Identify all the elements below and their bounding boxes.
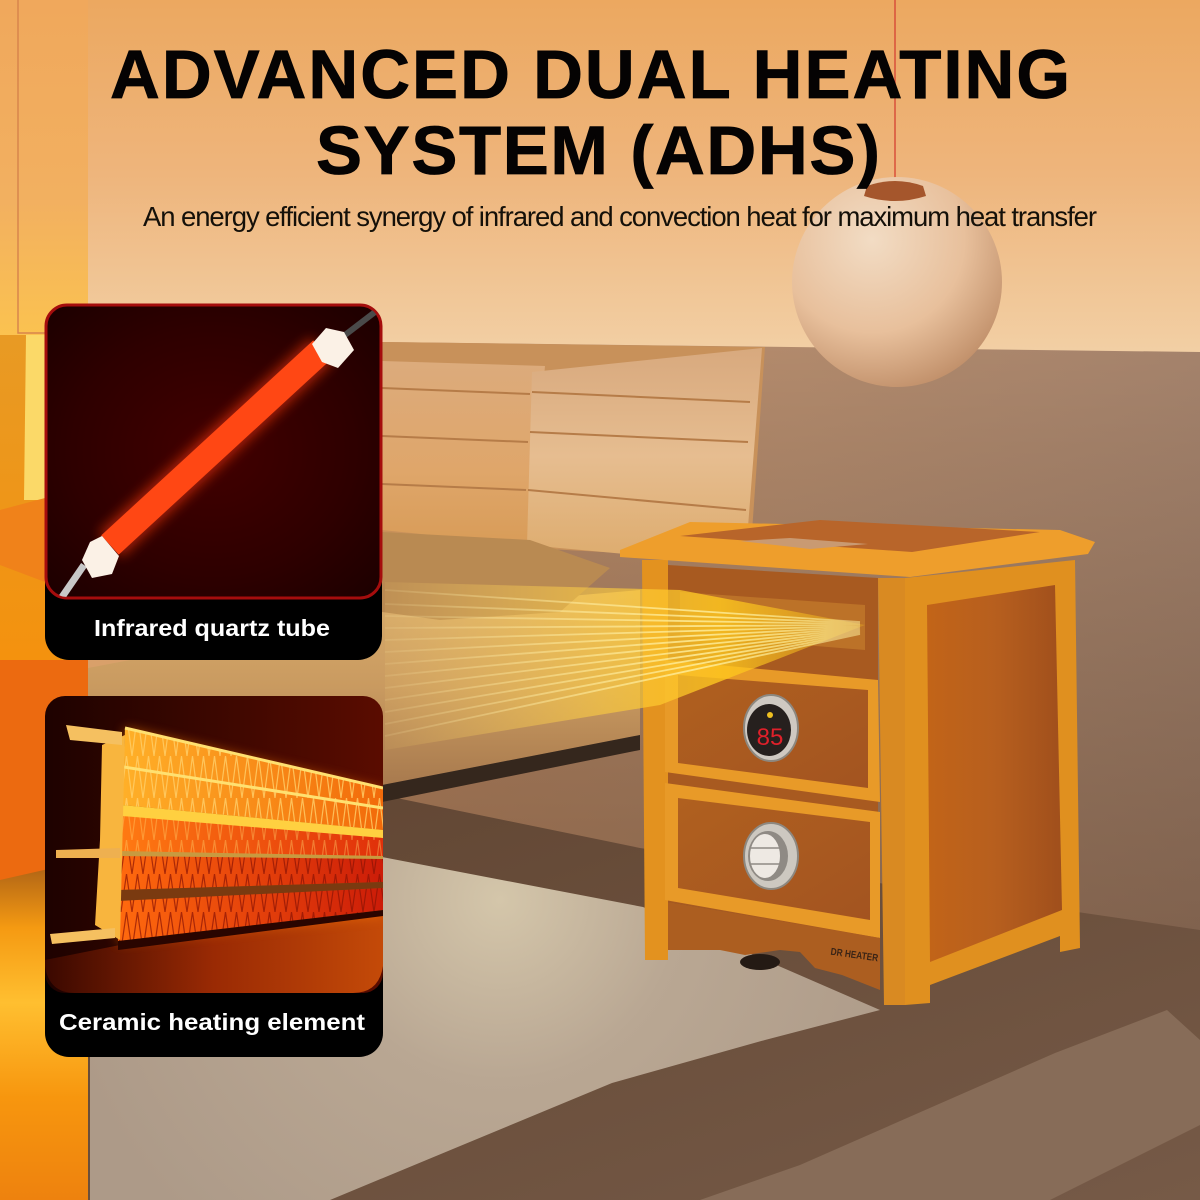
background: left glow strip upper — [0, 0, 88, 335]
wheel — [740, 954, 780, 970]
sofa — [88, 342, 765, 802]
left curved cushion — [0, 660, 88, 880]
background: wall — [0, 0, 1200, 360]
top silver patch — [740, 538, 868, 549]
title: ADVANCED DUAL HEATING — [110, 36, 1070, 113]
rug — [90, 857, 880, 1200]
icon: ceramic element — [45, 725, 383, 993]
label: ceramic heating element: Ceramic heating element — [59, 1009, 365, 1035]
display dial — [744, 695, 798, 761]
left cushion — [24, 335, 45, 500]
side panel — [927, 585, 1062, 962]
background: wall panel — [382, 342, 1200, 932]
side frame — [905, 560, 1080, 1005]
apron with scalloped edge — [668, 902, 880, 990]
left pillow — [0, 498, 45, 582]
panel: infrared quartz tube — [45, 304, 382, 660]
control dial — [744, 823, 798, 889]
product: wooden heater cabinet — [620, 520, 1095, 1005]
top lid — [620, 522, 1095, 577]
brand logo: DR HEATER — [830, 947, 880, 964]
heat beam — [385, 582, 865, 750]
top surface — [680, 520, 1040, 552]
display dial: 85 — [757, 724, 783, 751]
vent — [680, 592, 865, 650]
panel: ceramic heating element — [45, 696, 383, 1057]
icon: quartz tube — [62, 312, 375, 597]
label: infrared quartz tube: Infrared quartz tube — [94, 615, 330, 641]
background: floor — [0, 795, 1200, 1200]
pendant lamp — [792, 0, 1002, 387]
background: left glow strip lower — [0, 860, 88, 1200]
background: left glow strip middle — [0, 335, 88, 660]
title line two: SYSTEM (ADHS) — [316, 112, 880, 189]
background: parquet band — [700, 1010, 1200, 1200]
subtitle: An energy efficient synergy of infrared and convection heat for maximum heat transfer — [143, 201, 1097, 232]
